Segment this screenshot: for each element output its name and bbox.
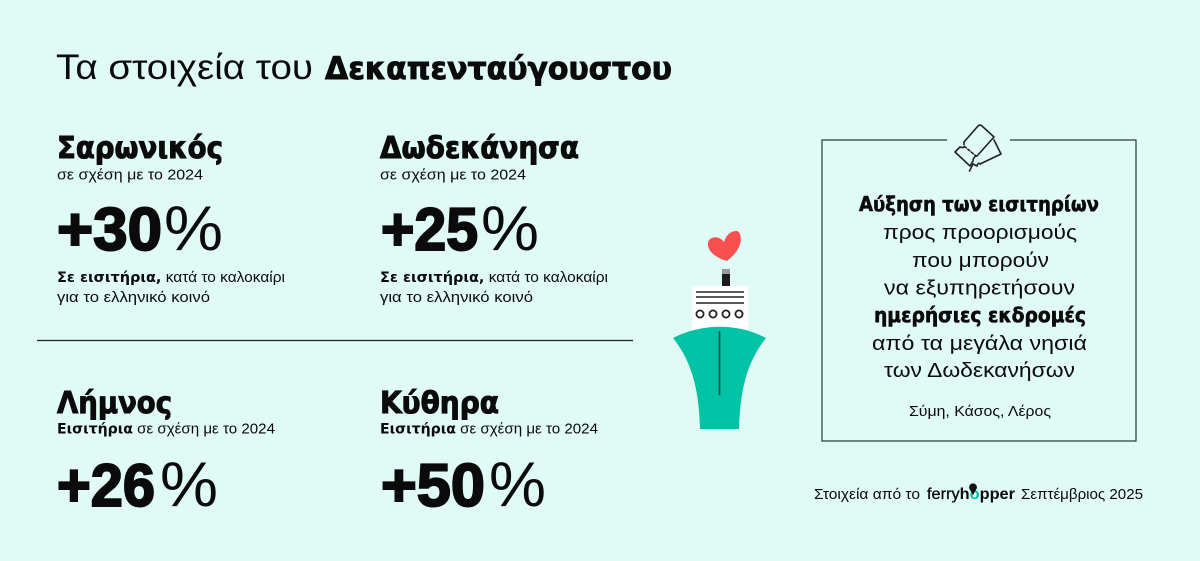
- figure: +26%: %: [160, 450, 218, 520]
- callout text: Αύξηση των εισιτηρίων: [859, 192, 1099, 216]
- note: Saronic: [57, 269, 285, 306]
- title: [56, 48, 672, 87]
- panel: Kythera: [380, 386, 598, 520]
- heading: Saronic: Σαρωνικός: [57, 131, 223, 166]
- note: Dodecanese: Σε εισιτήρια, κατά το καλοκαίρι: [380, 269, 608, 286]
- figure: +26%: [57, 450, 218, 520]
- figure: +50%: [381, 450, 546, 520]
- panel: callout box: [822, 125, 1136, 441]
- figure: +30%: %: [164, 194, 223, 264]
- subheading: Saronic: σε σχέση με το 2024: [57, 166, 203, 184]
- source line: Σεπτέμβριος 2025: [1021, 486, 1143, 503]
- note: Dodecanese: [380, 269, 608, 306]
- note: Saronic: Σε εισιτήρια, κατά το καλοκαίρι: [57, 269, 285, 286]
- logo: ferryhopper: ferryhopper: [927, 486, 1015, 503]
- heading: Lemnos: Λήμνος: [57, 386, 172, 421]
- title: Δεκαπενταύγουστου: [325, 51, 672, 87]
- callout text: ημερήσιες εκδρομές: [874, 303, 1086, 327]
- figure: +30%: [57, 194, 223, 264]
- figure: +25%: %: [481, 194, 539, 264]
- subheading: Kythera: Εισιτήρια σε σχέση με το 2024: [380, 420, 598, 438]
- panel: Lemnos: [57, 386, 275, 520]
- callout text: [859, 192, 1099, 420]
- panel: Dodecanese: [380, 131, 608, 306]
- heading: Dodecanese: Δωδεκάνησα: [380, 131, 579, 166]
- figure: +30%: +30: [57, 196, 162, 263]
- figure: +25%: [381, 194, 539, 264]
- subheading: Lemnos: Εισιτήρια σε σχέση με το 2024: [57, 420, 275, 438]
- callout text: από τα μεγάλα νησιά: [872, 332, 1087, 355]
- callout text: Σύμη, Κάσος, Λέρος: [909, 403, 1051, 420]
- callout text: που μπορούν: [912, 249, 1049, 272]
- panel: Saronic: [57, 131, 285, 306]
- callout text: των Δωδεκανήσων: [884, 359, 1075, 382]
- figure: +25%: +25: [381, 196, 478, 263]
- figure: +50%: +50: [381, 452, 485, 519]
- icon: tickets: [955, 125, 1001, 171]
- figure: +50%: %: [489, 450, 546, 520]
- callout text: προς προορισμούς: [883, 221, 1077, 244]
- source line: Στοιχεία από το: [814, 486, 920, 503]
- note: Saronic: για το ελληνικό κοινό: [57, 289, 210, 306]
- callout text: να εξυπηρετήσουν: [884, 276, 1075, 300]
- icon: ship with heart: [673, 231, 766, 429]
- figure: +26%: +26: [57, 452, 155, 519]
- title: Τα στοιχεία του: [56, 48, 313, 87]
- note: Dodecanese: για το ελληνικό κοινό: [380, 289, 533, 306]
- source line: [814, 483, 1143, 503]
- heading: Kythera: Κύθηρα: [380, 386, 499, 421]
- subheading: Dodecanese: σε σχέση με το 2024: [380, 166, 526, 184]
